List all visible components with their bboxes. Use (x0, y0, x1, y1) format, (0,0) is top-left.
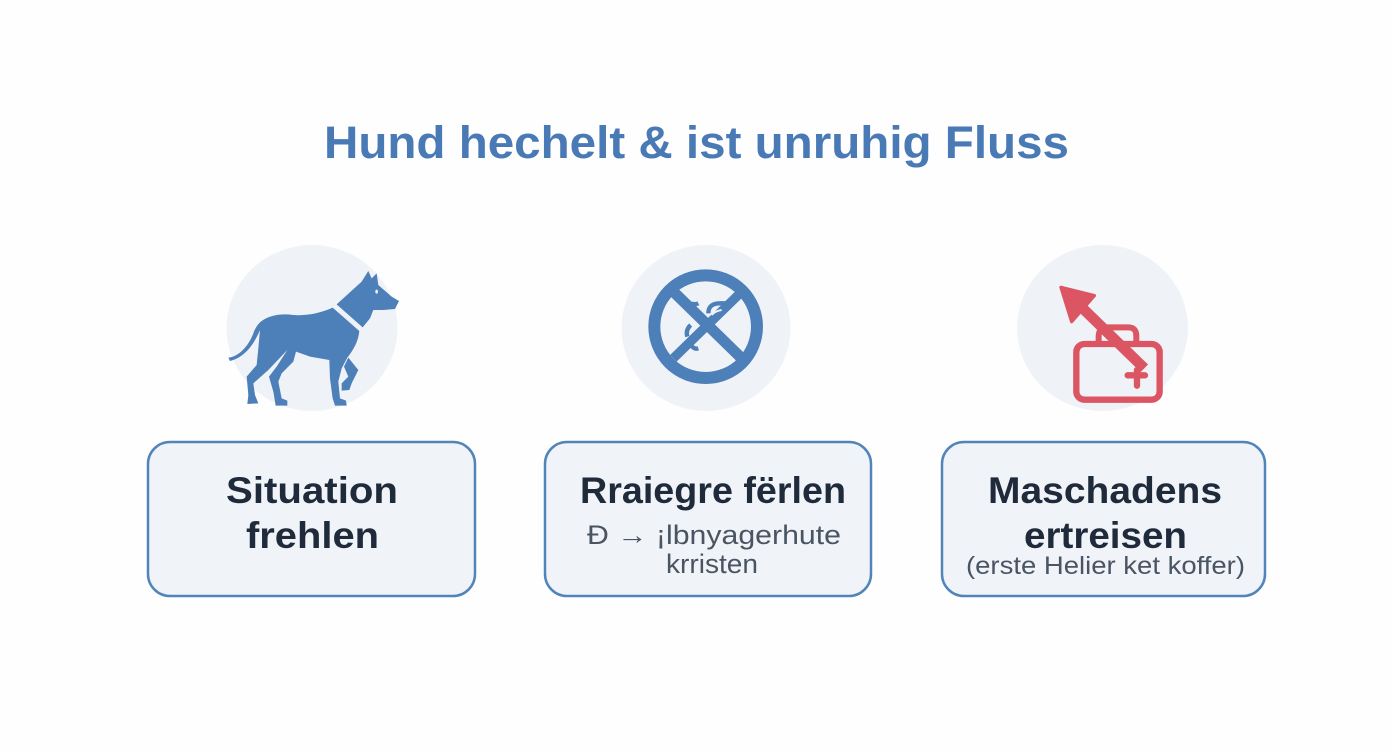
box: situation: frehlen (246, 515, 379, 556)
title: Hund hechelt & ist unruhig Fluss (324, 117, 1069, 168)
column 2: ferlen (545, 245, 871, 596)
icon: crossed-out circle (622, 245, 790, 411)
box: ferlen: Rraiegre fërlen (580, 470, 846, 511)
box: ferlen (545, 442, 871, 596)
box: maschadens (942, 442, 1265, 596)
icon: arrow and first aid case (1017, 245, 1188, 411)
box: ferlen: Ð → ¡lbnyagerhute (587, 520, 841, 550)
box: maschadens: ertreisen (1024, 515, 1187, 556)
box: situation (148, 442, 475, 596)
icon: dog (226, 245, 399, 411)
column 1: situation (148, 245, 475, 596)
box: maschadens: (erste Helier ket koffer) (966, 552, 1245, 580)
box: situation: Situation (226, 470, 398, 511)
box: ferlen: krristen (666, 549, 758, 579)
column 3: maschadens (942, 245, 1265, 596)
box: maschadens: Maschadens (988, 470, 1222, 511)
